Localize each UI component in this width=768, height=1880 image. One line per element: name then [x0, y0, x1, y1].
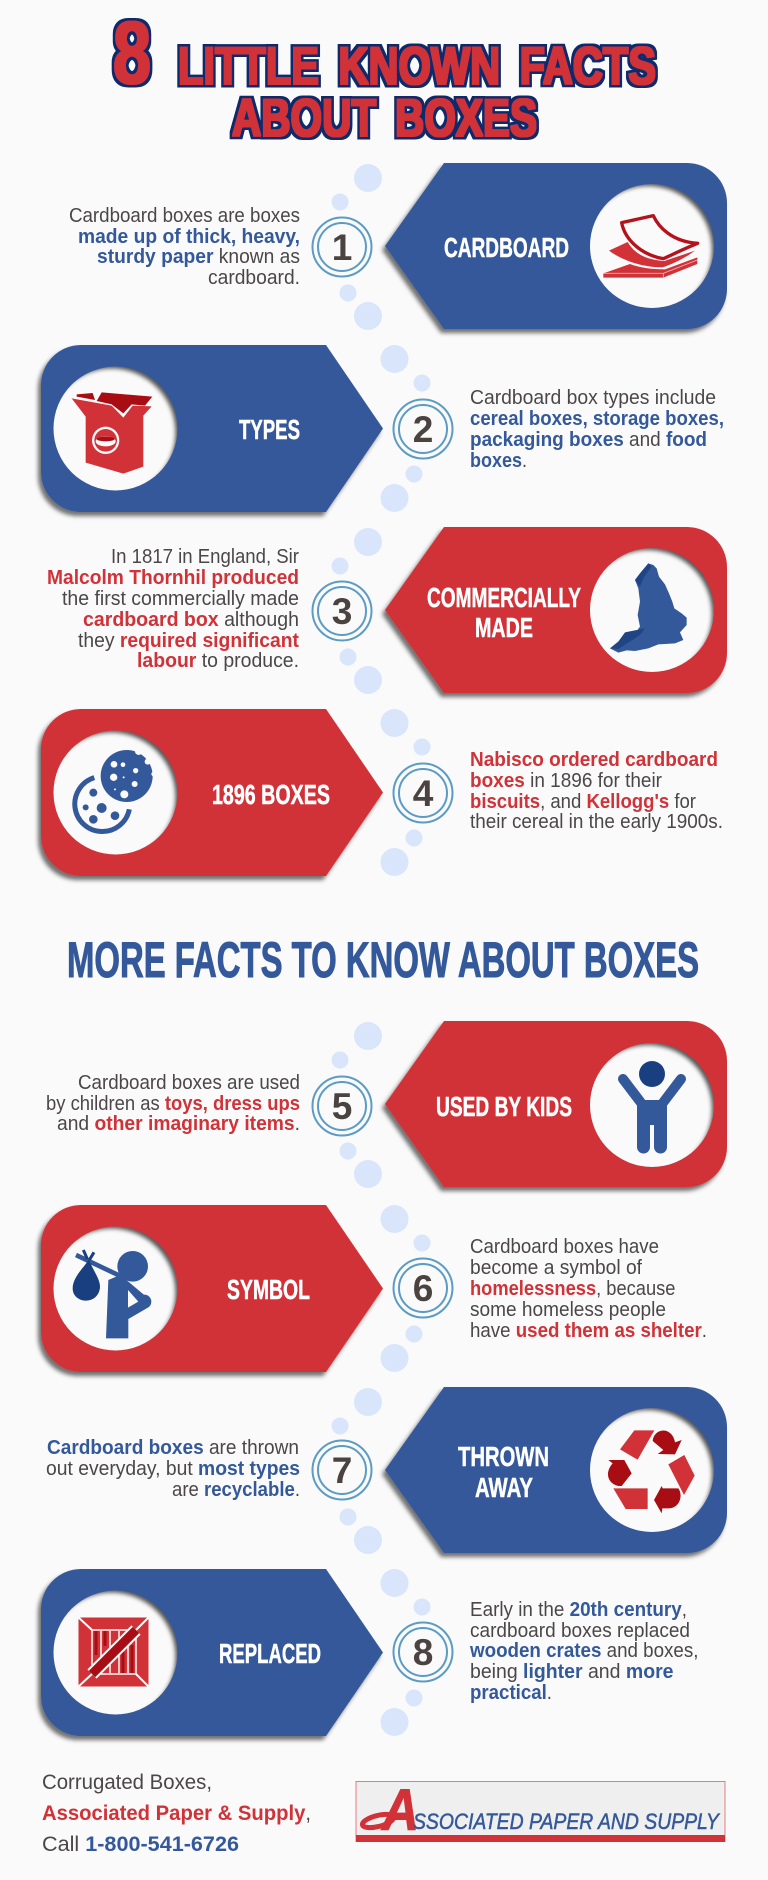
- text 4: Nabisco ordered cardboard: [470, 749, 718, 771]
- fact 7: [46, 1387, 727, 1554]
- logo: SSOCIATED PAPER AND SUPPLY: [413, 1809, 720, 1834]
- text 7: out everyday, but most types: [46, 1458, 300, 1480]
- title: [113, 3, 656, 148]
- text 3: cardboard box although: [83, 609, 299, 631]
- number 2: [394, 400, 452, 458]
- panel: thrown away: AWAY: [475, 1472, 533, 1503]
- text 1: sturdy paper known as: [97, 246, 300, 268]
- panel: commercially made: MADE: [475, 612, 533, 643]
- footer contact text: Call 1-800-541-6726: [42, 1833, 239, 1856]
- text 3: [47, 546, 299, 672]
- text 2: packaging boxes and food: [470, 429, 707, 451]
- fact 2: [41, 345, 724, 512]
- text 2: Cardboard box types include: [470, 387, 716, 409]
- fact 5: [46, 1021, 727, 1188]
- number 6: 6: [413, 1268, 433, 1309]
- icon: map of England: [610, 563, 687, 653]
- text 3: they required significant: [78, 630, 299, 652]
- text 2: cereal boxes, storage boxes,: [470, 408, 724, 430]
- text 3: the first commercially made: [62, 588, 299, 610]
- text 3: Malcolm Thornhil produced: [47, 567, 299, 589]
- panel: types: [41, 345, 383, 512]
- text 8: Early in the 20th century,: [470, 1599, 687, 1621]
- logo: A: [380, 1778, 419, 1843]
- text 7: Cardboard boxes are thrown: [47, 1437, 299, 1459]
- text 1: [69, 205, 300, 289]
- text 7: are recyclable.: [172, 1479, 300, 1501]
- icon: cardboard sheets: [603, 216, 698, 278]
- text 8: [469, 1599, 698, 1704]
- text 6: Cardboard boxes have: [470, 1236, 659, 1258]
- number 5: 5: [332, 1086, 352, 1127]
- text 5: [46, 1072, 300, 1135]
- text 5: Cardboard boxes are used: [78, 1072, 300, 1094]
- number 1: 1: [332, 227, 352, 268]
- panel: thrown away: [385, 1387, 727, 1553]
- panel: symbol: [41, 1205, 383, 1372]
- text 4: [470, 749, 723, 833]
- panel: replaced: REPLACED: [219, 1638, 321, 1669]
- panel: 1896 boxes: [41, 709, 383, 876]
- panel: used by kids: USED BY KIDS: [436, 1091, 572, 1122]
- text 8: wooden crates and boxes,: [469, 1640, 698, 1662]
- text 1: cardboard.: [208, 267, 300, 289]
- text 2: boxes.: [470, 450, 527, 472]
- text 7: [46, 1437, 300, 1501]
- text 4: biscuits, and Kellogg's for: [470, 791, 696, 813]
- icon: wooden crate: [78, 1617, 149, 1687]
- number 6: [394, 1258, 452, 1318]
- logo: [356, 1778, 725, 1843]
- fact 3: [47, 527, 727, 694]
- number 8: [394, 1622, 452, 1682]
- panel: commercially made: [385, 527, 727, 693]
- text 6: homelessness, because: [470, 1278, 676, 1300]
- title: ABOUT BOXES: [232, 89, 537, 148]
- text 1: Cardboard boxes are boxes: [69, 205, 300, 227]
- icon: child: [623, 1061, 681, 1154]
- number 4: 4: [413, 773, 434, 814]
- icon: person with bundle: [73, 1250, 151, 1338]
- text 5: and other imaginary items.: [57, 1113, 300, 1135]
- text 2: [470, 387, 724, 472]
- fact 6: [41, 1205, 707, 1372]
- footer contact text: Associated Paper & Supply,: [42, 1802, 311, 1825]
- number 4: [394, 764, 452, 822]
- footer contact text: [42, 1771, 311, 1856]
- number 1: [312, 218, 372, 276]
- text 4: their cereal in the early 1900s.: [470, 811, 723, 833]
- panel: cardboard: [385, 163, 727, 329]
- number 3: [312, 582, 372, 640]
- text 6: some homeless people: [470, 1299, 666, 1321]
- fact 8: [41, 1569, 698, 1736]
- text 1: made up of thick, heavy,: [78, 226, 300, 248]
- text 4: boxes in 1896 for their: [470, 770, 662, 792]
- panel: cardboard: CARDBOARD: [444, 232, 569, 263]
- text 5: by children as toys, dress ups: [46, 1093, 300, 1115]
- number 8: 8: [413, 1632, 433, 1673]
- panel: used by kids: [385, 1021, 727, 1187]
- number 2: 2: [413, 409, 433, 450]
- panel: commercially made: COMMERCIALLY: [427, 582, 581, 613]
- text 3: In 1817 in England, Sir: [111, 546, 299, 568]
- icon: cookies: [75, 748, 156, 832]
- title: 8: [113, 3, 151, 102]
- footer contact text: Corrugated Boxes,: [42, 1771, 212, 1794]
- number 7: 7: [332, 1450, 352, 1491]
- fact 4: [41, 709, 723, 876]
- number 3: 3: [332, 591, 352, 632]
- text 8: practical.: [470, 1682, 552, 1704]
- panel: 1896 boxes: 1896 BOXES: [212, 779, 330, 810]
- icon: recycle: [608, 1430, 695, 1513]
- panel: replaced: [41, 1569, 383, 1736]
- text 6: [470, 1236, 707, 1342]
- panel: types: TYPES: [239, 414, 300, 445]
- number 7: [312, 1440, 372, 1500]
- text 8: being lighter and more: [470, 1661, 673, 1683]
- text 6: have used them as shelter.: [470, 1320, 707, 1342]
- panel: thrown away: THROWN: [458, 1441, 549, 1472]
- text 6: become a symbol of: [470, 1257, 642, 1279]
- number 5: [312, 1076, 372, 1136]
- icon: cereal box: [72, 392, 152, 474]
- panel: symbol: SYMBOL: [227, 1274, 310, 1305]
- text 8: cardboard boxes replaced: [470, 1620, 690, 1642]
- text 3: labour to produce.: [137, 650, 299, 672]
- fact 1: [69, 163, 727, 330]
